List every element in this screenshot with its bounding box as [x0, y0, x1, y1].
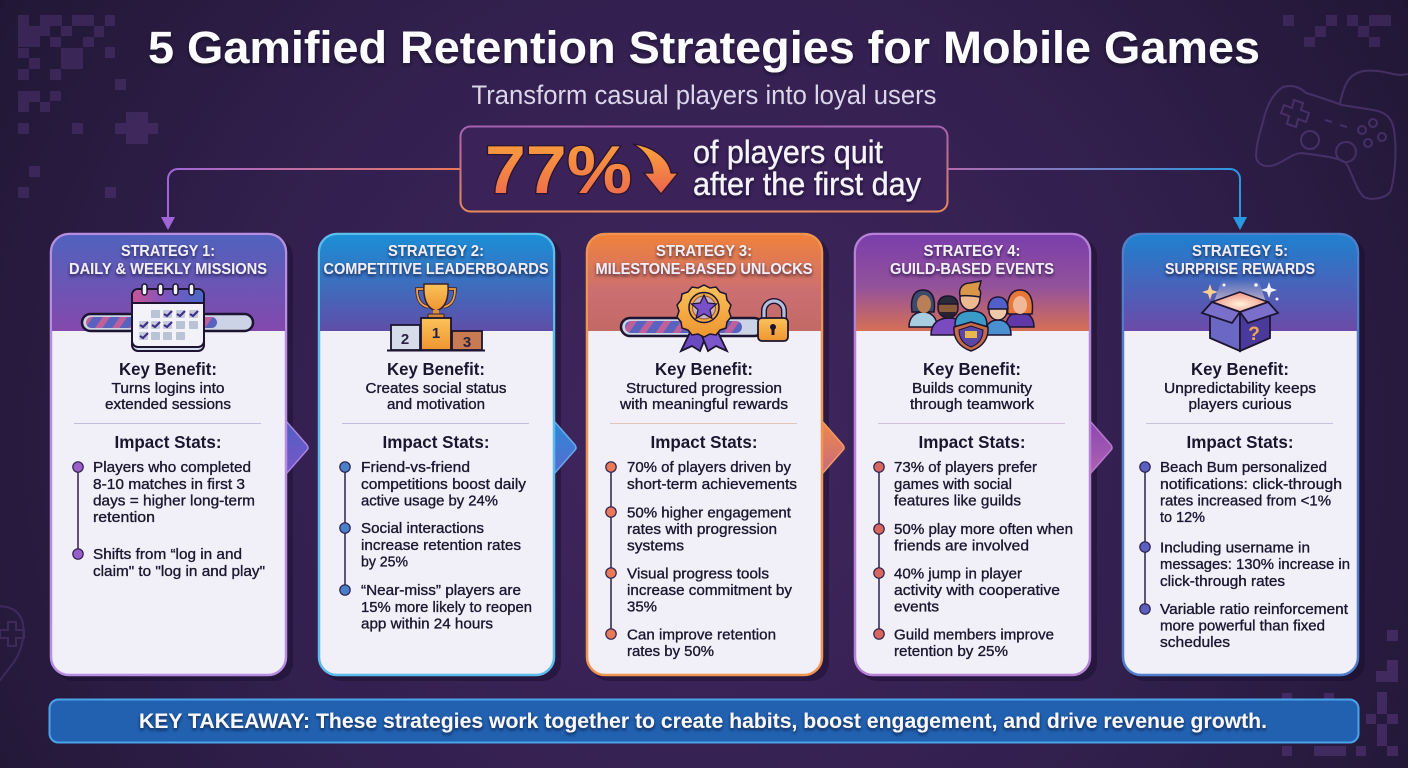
impact stats list: Guild members improve [894, 626, 1054, 644]
icon: down arrow [633, 144, 678, 194]
icon: guild members with shield [909, 281, 1034, 351]
key takeaway banner [50, 700, 1358, 742]
impact stats list: increase retention rates [361, 537, 521, 554]
bullet timeline [340, 462, 350, 595]
key benefit: Key Benefit: [1191, 359, 1289, 379]
key benefit: extended sessions [105, 396, 231, 413]
key benefit [366, 359, 506, 413]
impact stats heading: Impact Stats: [382, 432, 490, 452]
impact stats list: systems [627, 538, 684, 554]
icon: medal, progress bar and lock [621, 285, 788, 351]
heading [596, 243, 812, 278]
key benefit: Creates social status [366, 380, 506, 397]
impact stats list: Friend-vs-friend [361, 459, 470, 476]
key benefit: Key Benefit: [387, 359, 485, 379]
heading [324, 243, 548, 278]
key benefit [1164, 359, 1316, 413]
impact stats list [93, 459, 265, 580]
panel: strategy 4 [855, 234, 1112, 681]
key benefit: Unpredictability keeps [1164, 380, 1316, 397]
impact stats list: 50% higher engagement [627, 504, 792, 522]
impact stats list: features like guilds [894, 492, 1021, 510]
key benefit: through teamwork [910, 396, 1035, 413]
impact stats list: schedules [1160, 634, 1230, 651]
decorative pixels top left [18, 15, 158, 198]
impact stats list: days = higher long-term [93, 492, 255, 510]
icon: trophy on podium: 1 [432, 325, 440, 342]
panel: strategy 3 [587, 234, 844, 681]
impact stats list: competitions boost daily [361, 476, 527, 493]
icon: background game controller bottom left [0, 606, 24, 684]
icon: trophy on podium [387, 284, 485, 351]
impact stats list: by 25% [361, 554, 408, 570]
impact stats list: short-term achievements [627, 476, 797, 493]
impact stats list: rates increased from <1% [1160, 492, 1331, 510]
title: 5 Gamified Retention Strategies for Mobile Games [148, 22, 1260, 73]
impact stats list: Can improve retention [627, 626, 776, 644]
heading: STRATEGY 1: [121, 243, 215, 260]
impact stats list [627, 459, 797, 660]
key benefit: Key Benefit: [119, 359, 217, 379]
impact stats list: notifications: click-through [1160, 476, 1342, 493]
impact stats list: Beach Bum personalized [1160, 459, 1327, 476]
icon: trophy on podium: 3 [463, 334, 471, 351]
heading: MILESTONE-BASED UNLOCKS [596, 261, 812, 278]
heading: STRATEGY 2: [388, 243, 484, 260]
key benefit: players curious [1188, 396, 1292, 413]
impact stats list: rates with progression [627, 521, 777, 538]
connector arrow: left [161, 169, 460, 230]
impact stats list: more powerful than fixed [1160, 618, 1325, 634]
connector chevron 4 [1090, 421, 1112, 474]
key benefit: Turns logins into [112, 380, 224, 397]
impact stats list: to 12% [1160, 509, 1205, 526]
impact stats list: events [894, 598, 939, 616]
impact stats list: 50% play more often when [894, 521, 1073, 538]
impact stats list: Shifts from “log in and [93, 546, 242, 563]
heading [69, 243, 267, 278]
key benefit [910, 359, 1035, 413]
heading: GUILD-BASED EVENTS [890, 261, 1054, 278]
impact stats list: Including username in [1160, 540, 1310, 556]
impact stats list: app within 24 hours [361, 616, 493, 632]
key benefit: Key Benefit: [655, 359, 753, 379]
impact stats list: claim" to "log in and play" [93, 563, 265, 580]
impact stats list: active usage by 24% [361, 492, 498, 510]
decorative pixels top right [1283, 15, 1391, 47]
impact stats list [361, 459, 532, 632]
bullet timeline [606, 462, 616, 639]
takeaway text: KEY TAKEAWAY: These strategies work together to create habits, boost engagement, and drive revenue growth. [139, 710, 1267, 733]
icon: mystery box [1202, 279, 1278, 351]
impact stats list: rates by 50% [627, 643, 714, 660]
impact stats list: retention by 25% [894, 643, 1008, 660]
impact stats list: activity with cooperative [894, 582, 1060, 599]
bullet timeline [874, 462, 884, 639]
impact stats list: Variable ratio reinforcement [1160, 601, 1349, 618]
stat: 77%: 77% [485, 132, 632, 208]
impact stats list: 35% [627, 598, 657, 616]
icon: background game controller top right [1256, 71, 1408, 199]
heading [890, 243, 1054, 278]
decorative pixels bottom right [1282, 630, 1398, 756]
callout text [693, 134, 921, 202]
impact stats list: Players who completed [93, 459, 251, 476]
callout text: of players quit [693, 134, 883, 170]
impact stats list: messages: 130% increase in [1160, 556, 1350, 573]
icon: calendar with progress bar [82, 284, 253, 351]
key benefit: and motivation [387, 396, 485, 413]
bullet timeline [73, 462, 83, 559]
impact stats list: increase commitment by [627, 582, 792, 599]
key benefit: Key Benefit: [923, 359, 1021, 379]
heading: COMPETITIVE LEADERBOARDS [324, 261, 548, 278]
panel: strategy 1 [51, 234, 308, 681]
panel: strategy 2 [319, 234, 576, 681]
impact stats list: friends are involved [894, 538, 1029, 554]
impact stats heading: Impact Stats: [114, 432, 222, 452]
key benefit: Builds community [912, 380, 1033, 397]
heading: STRATEGY 5: [1192, 243, 1288, 260]
impact stats heading: Impact Stats: [918, 432, 1026, 452]
impact stats list: Visual progress tools [627, 566, 769, 582]
heading: STRATEGY 3: [656, 243, 752, 260]
subtitle: Transform casual players into loyal users [472, 80, 936, 110]
heading: DAILY & WEEKLY MISSIONS [69, 261, 267, 278]
panel: strategy 5 [1123, 234, 1365, 681]
key benefit: Structured progression [626, 380, 782, 397]
impact stats list: 8-10 matches in first 3 [93, 476, 245, 493]
heading: SURPRISE REWARDS [1165, 261, 1315, 278]
impact stats list: Social interactions [361, 520, 484, 537]
impact stats list [894, 459, 1073, 660]
impact stats list: “Near-miss” players are [361, 582, 521, 599]
heading [1165, 243, 1315, 278]
impact stats list [1160, 459, 1350, 651]
key benefit: with meaningful rewards [619, 396, 788, 413]
impact stats heading: Impact Stats: [650, 432, 758, 452]
heading: STRATEGY 4: [924, 243, 1020, 260]
bullet timeline [1140, 462, 1150, 614]
icon: mystery box: ? [1248, 324, 1260, 345]
impact stats list: click-through rates [1160, 573, 1285, 590]
impact stats list: retention [93, 509, 155, 526]
connector arrow: right [948, 169, 1247, 230]
key benefit [105, 359, 231, 413]
icon: trophy on podium: 2 [401, 331, 409, 348]
callout text: after the first day [693, 166, 921, 202]
impact stats list: 40% jump in player [894, 566, 1022, 582]
connector chevron 3 [822, 421, 844, 474]
connector chevron 1 [286, 421, 308, 474]
impact stats heading: Impact Stats: [1186, 432, 1294, 452]
callout: 77% of players quit [460, 126, 948, 212]
key benefit [619, 359, 788, 413]
connector chevron 2 [554, 421, 576, 474]
impact stats list: 15% more likely to reopen [361, 599, 532, 616]
impact stats list: 73% of players prefer [894, 459, 1037, 476]
impact stats list: 70% of players driven by [627, 459, 791, 476]
impact stats list: games with social [894, 476, 1012, 493]
